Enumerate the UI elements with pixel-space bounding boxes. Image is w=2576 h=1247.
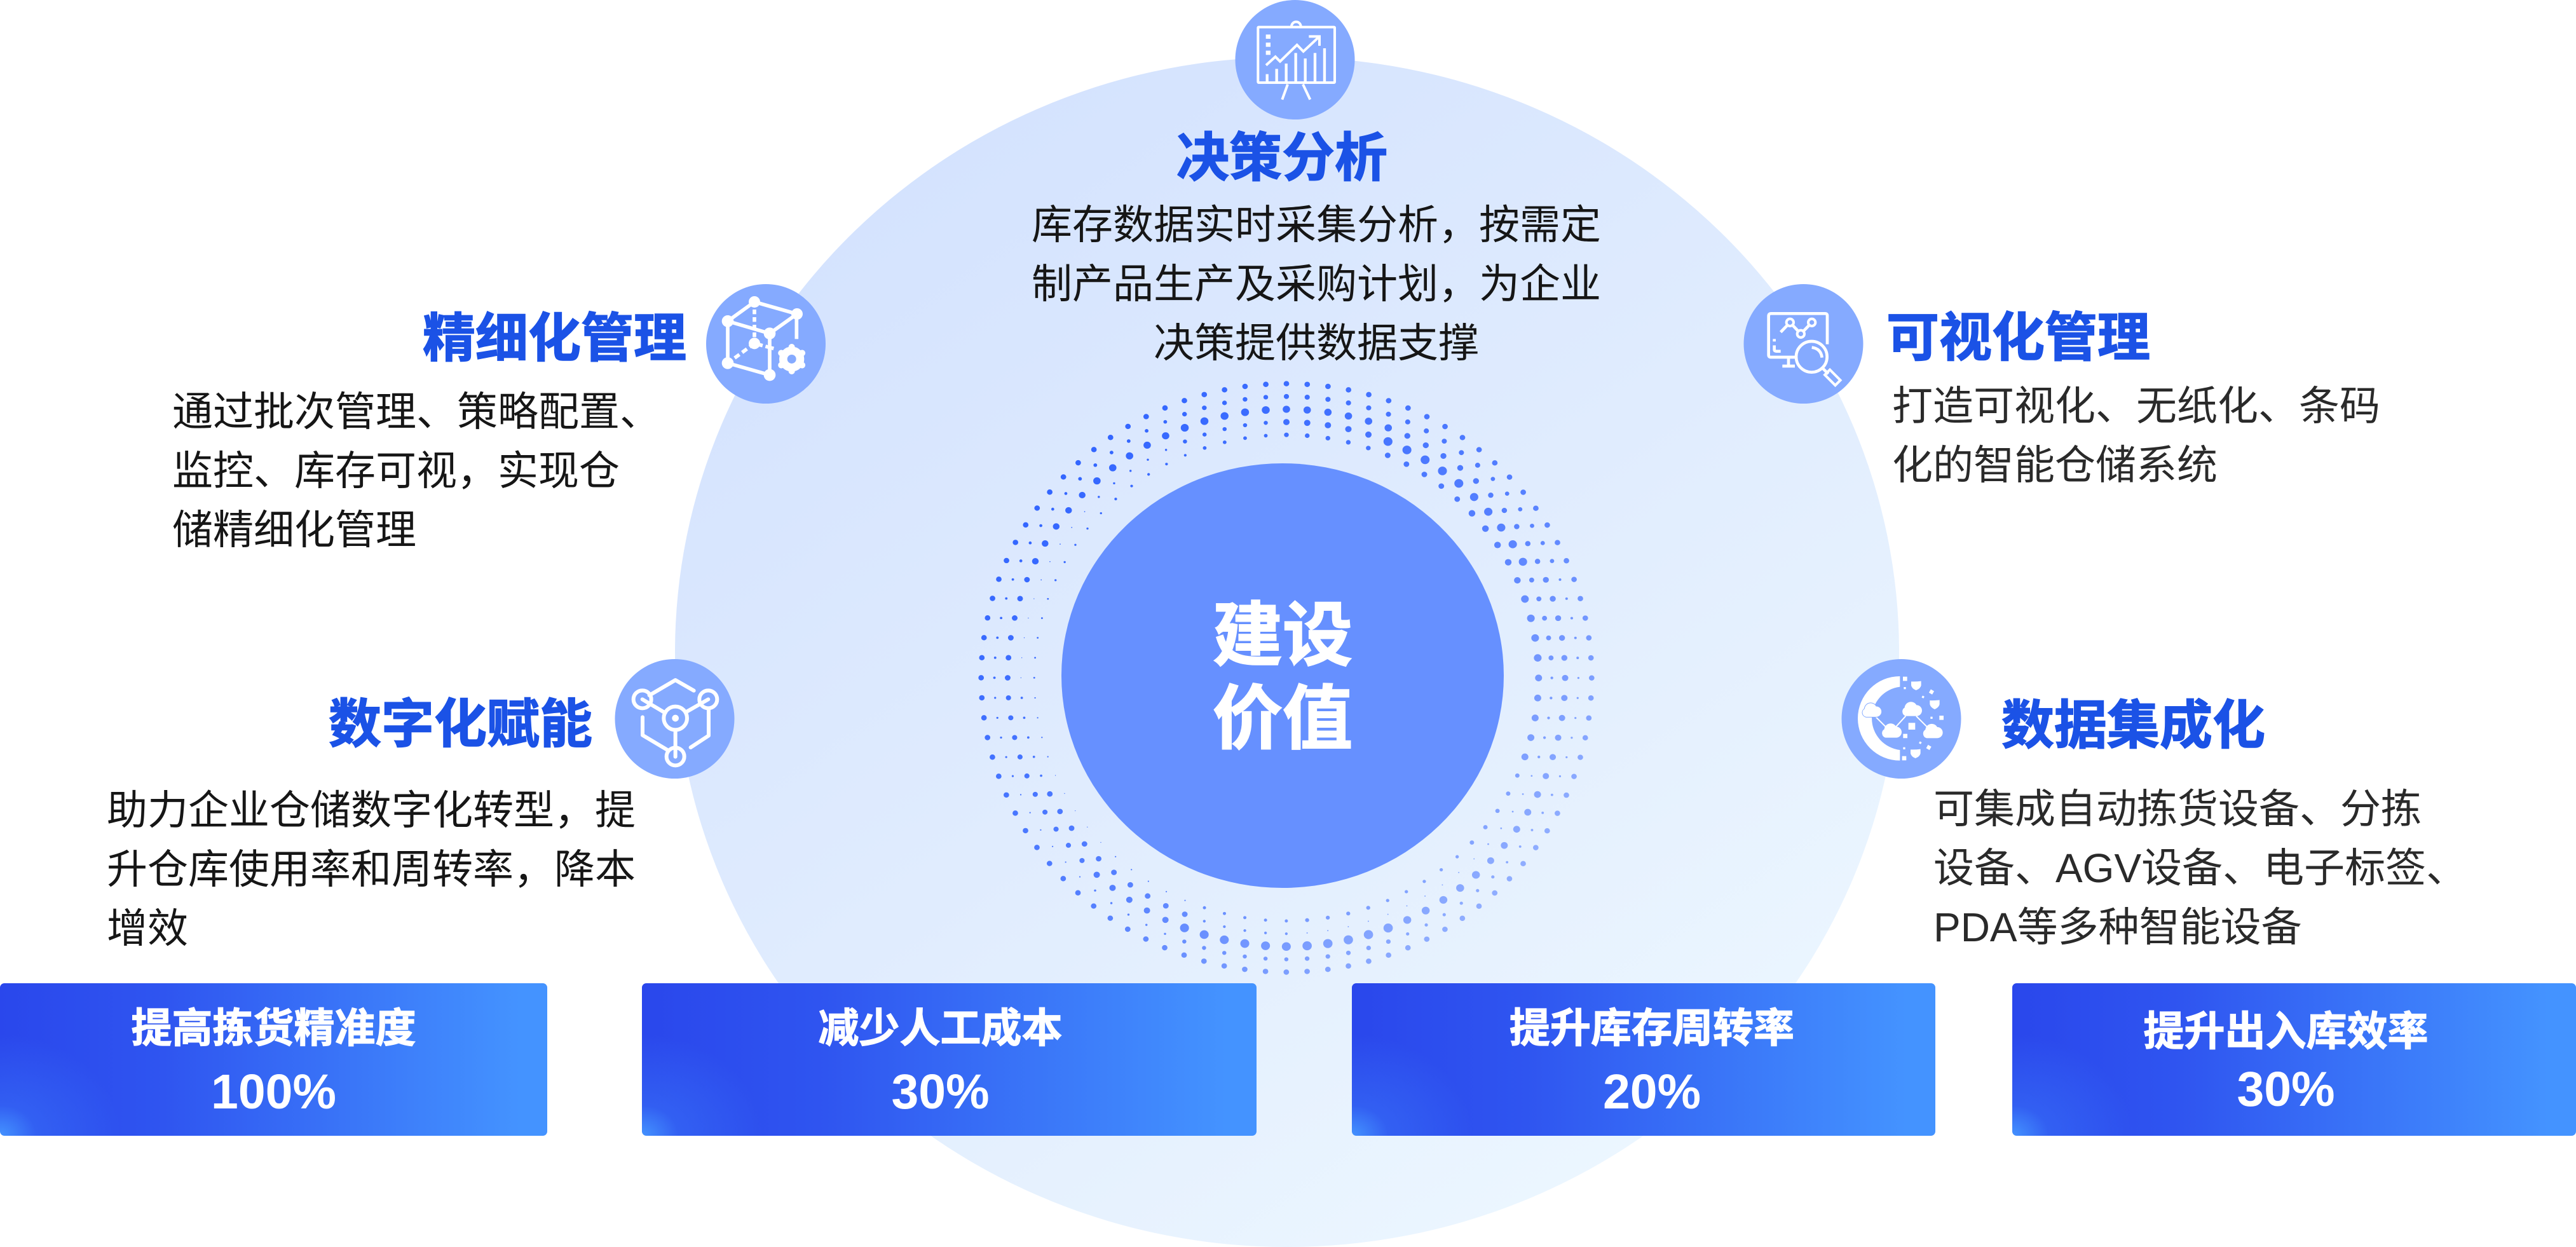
heading: 精细化管理: 精细化管理: [423, 309, 686, 368]
dotted ring around the centre: [981, 384, 1591, 972]
text: 精细化管理 description: 通过批次管理、策略配置、: [172, 389, 660, 435]
text: 数据集成化 description: PDA等多种智能设备: [1933, 904, 2302, 950]
metric bar: 减少人工成本 30%: [642, 983, 1257, 1136]
text: 可视化管理 description: [1892, 383, 2380, 488]
icon: presentation board with chart: [1236, 0, 1355, 119]
heading: 可视化管理: 可视化管理: [1886, 308, 2150, 367]
icon: cube with gear: [706, 284, 826, 404]
text: 精细化管理 description: [172, 389, 660, 553]
text: 可视化管理 description: 打造可视化、无纸化、条码: [1892, 383, 2380, 429]
icon: monitor with magnifier: [1744, 284, 1864, 404]
metric bar: 提高拣货精准度 100%: [0, 983, 547, 1136]
metric bar: 减少人工成本 30%: 减少人工成本: [819, 1005, 1063, 1051]
text: 决策分析 description: 制产品生产及采购计划，为企业: [1032, 261, 1601, 307]
metric bar: 减少人工成本 30%: 30%: [891, 1065, 990, 1119]
metric bar: 提升出入库效率 30%: 30%: [2237, 1062, 2335, 1117]
metric bar: 提高拣货精准度 100%: 100%: [211, 1065, 336, 1119]
metric bar: 提升出入库效率 30%: [2012, 983, 2576, 1136]
large background circle: [675, 57, 1899, 1247]
metric bar: 提升出入库效率 30%: 提升出入库效率: [2143, 1009, 2428, 1054]
centre title: 建设: [1213, 597, 1353, 675]
text: 数字化赋能 description: 升仓库使用率和周转率，降本: [107, 847, 636, 892]
icon: network hexagon: [615, 659, 735, 779]
metric bar: 提高拣货精准度 100%: 提高拣货精准度: [131, 1005, 416, 1051]
text: 精细化管理 description: 储精细化管理: [172, 507, 416, 553]
icon: cloud data integration: [1842, 659, 1961, 779]
text: 精细化管理 description: 监控、库存可视，实现仓: [172, 448, 620, 494]
metric bar: 提升库存周转率 20%: [1352, 983, 1935, 1136]
central circle: [1061, 463, 1504, 888]
metric bar: 提升库存周转率 20%: 提升库存周转率: [1509, 1005, 1794, 1051]
text: 数字化赋能 description: 助力企业仓储数字化转型，提: [107, 787, 636, 833]
text: 数据集成化 description: 设备、AGV设备、电子标签、: [1933, 845, 2467, 891]
heading: 数据集成化: 数据集成化: [2001, 696, 2265, 755]
centre title: 价值: [1213, 680, 1353, 758]
centre title: [1213, 597, 1353, 758]
heading: 数字化赋能: 数字化赋能: [329, 695, 592, 754]
text: 决策分析 description: [1032, 202, 1601, 366]
text: 决策分析 description: 库存数据实时采集分析，按需定: [1032, 202, 1601, 248]
text: 决策分析 description: 决策提供数据支撑: [1154, 320, 1479, 366]
text: 数据集成化 description: [1933, 786, 2467, 950]
metric bar: 提升库存周转率 20%: 20%: [1603, 1065, 1701, 1119]
text: 可视化管理 description: 化的智能仓储系统: [1892, 442, 2218, 488]
text: 数字化赋能 description: 增效: [107, 906, 188, 951]
heading: 决策分析: 决策分析: [1176, 128, 1387, 187]
text: 数字化赋能 description: [107, 787, 636, 951]
text: 数据集成化 description: 可集成自动拣货设备、分拣: [1933, 786, 2422, 832]
